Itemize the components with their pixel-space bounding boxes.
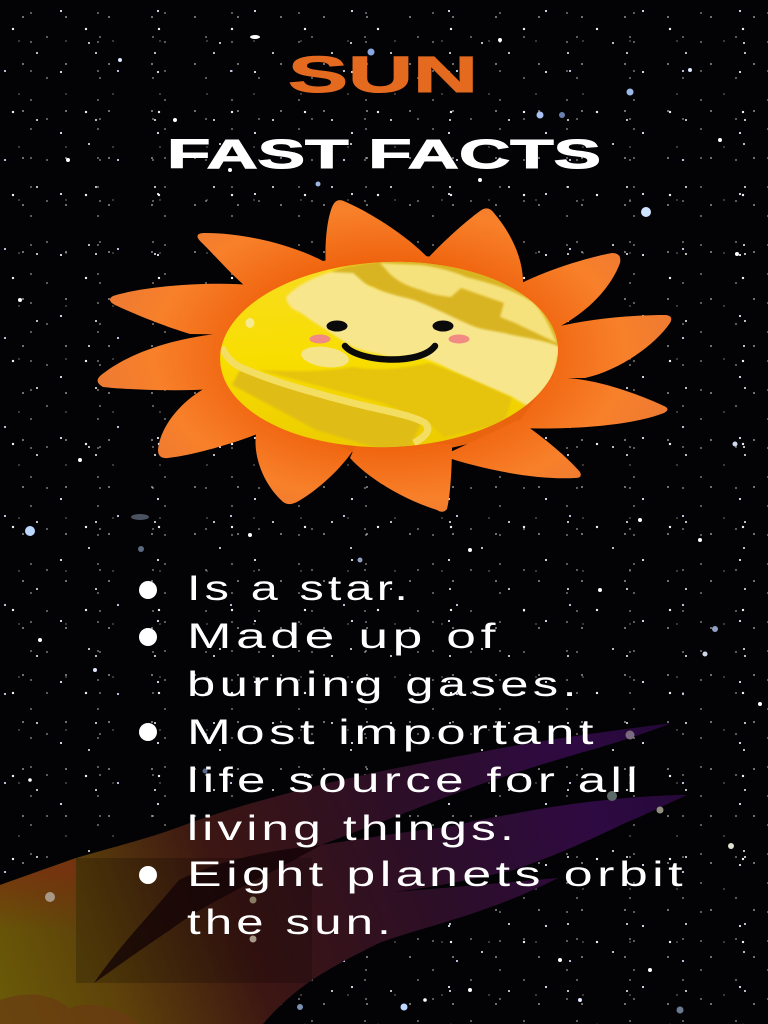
cream face patch — [286, 272, 560, 410]
fact: planets: the sun. — [187, 903, 395, 942]
fact: life source: living things. — [187, 809, 518, 848]
top cream patch — [380, 263, 557, 343]
right cheek — [448, 334, 470, 344]
fact: life source: life source for all — [187, 761, 642, 800]
bullet dots — [139, 581, 157, 884]
sun illustration — [98, 200, 671, 512]
lower golden band — [232, 370, 421, 450]
fact: life source: Most important — [187, 713, 598, 752]
nebula streaks — [0, 723, 687, 1024]
nebula dark wedge — [94, 845, 321, 983]
fact: gases — [187, 617, 581, 704]
sun rays — [98, 200, 671, 512]
right eye — [432, 320, 454, 332]
fact: star: Is a star. — [187, 569, 412, 608]
nebula square overlay — [76, 858, 312, 983]
fact: gases: Made up of — [187, 617, 500, 656]
bullet list — [139, 569, 687, 942]
heading: FAST FACTS: FAST FACTS — [167, 131, 601, 177]
pale stripe — [222, 347, 428, 443]
sun body — [217, 256, 562, 453]
left cheek — [310, 334, 330, 344]
nebula lower swirl — [0, 995, 138, 1024]
fact: planets — [187, 855, 687, 942]
body highlight — [246, 318, 254, 328]
fact: gases: burning gases. — [187, 665, 581, 704]
middle golden band — [259, 363, 512, 437]
upper golden swirl — [332, 262, 558, 403]
left eye — [326, 320, 348, 332]
title: SUN: SUN — [288, 46, 478, 103]
fact: planets: Eight planets orbit — [187, 855, 687, 894]
nebula red edge — [0, 858, 76, 930]
nose blob — [300, 344, 350, 370]
fact: life source — [187, 713, 642, 848]
smile — [345, 346, 435, 360]
